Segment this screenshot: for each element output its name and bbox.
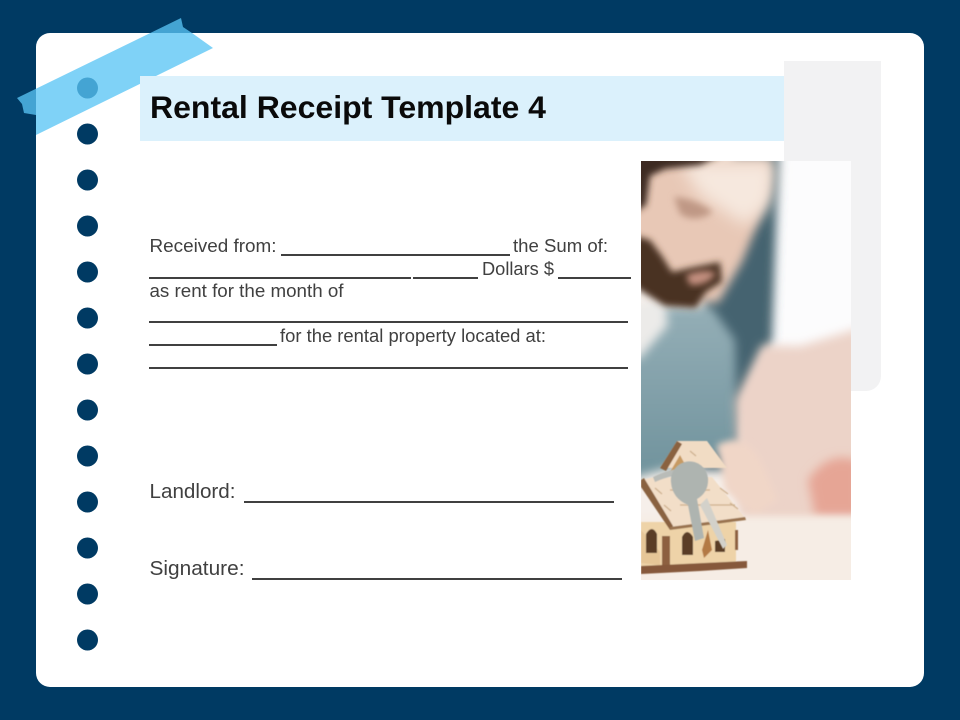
decorative tape — [17, 18, 213, 135]
windows and timber — [646, 529, 657, 553]
dark wall — [700, 150, 779, 470]
upper roof — [660, 441, 727, 468]
title banner — [140, 76, 784, 141]
receipt body text: as rent for the month of — [150, 280, 344, 301]
signature line: Signature: — [150, 557, 244, 580]
table — [738, 512, 851, 532]
keys — [653, 461, 727, 549]
walls — [641, 522, 736, 567]
receipt body text — [149, 235, 631, 369]
landlord line: Landlord: — [150, 480, 236, 503]
grey accent panel — [784, 61, 881, 391]
man's face — [630, 158, 772, 303]
roof tile marks — [655, 451, 738, 511]
receipt body text: Received from: — [150, 235, 276, 256]
beard — [632, 235, 722, 308]
title: Rental Receipt Template 4 — [150, 89, 546, 125]
eye shadow — [674, 197, 713, 219]
receipt body text: the Sum of: — [513, 235, 608, 256]
base — [641, 561, 747, 574]
photo: couple with model house and keys — [641, 161, 851, 580]
woman's top — [735, 328, 860, 530]
window light — [771, 161, 851, 347]
lips — [686, 271, 716, 285]
receipt body text: for the rental property located at: — [280, 325, 546, 346]
model house — [641, 441, 747, 574]
receipt body text: Dollars $ — [482, 258, 555, 279]
hands — [713, 436, 742, 502]
man's shirt — [625, 307, 738, 480]
binder holes — [77, 78, 98, 650]
hair — [641, 161, 720, 215]
lower roof — [641, 477, 745, 527]
